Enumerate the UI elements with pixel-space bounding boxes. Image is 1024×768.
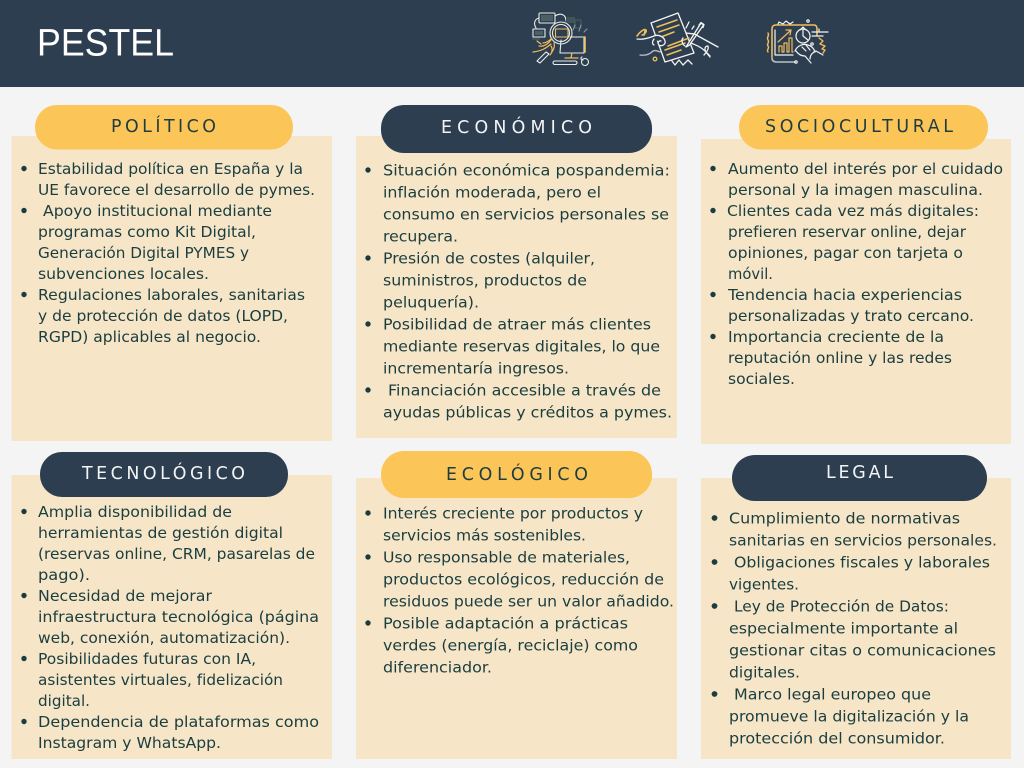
text: Legal: Ley de Protección de Datos: xyxy=(734,598,949,616)
text: Tecnológico: digital. xyxy=(38,692,90,710)
heading pill: Tecnológico: TECNOLÓGICO xyxy=(81,462,245,484)
text: Sociocultural: personalizadas y trato cercano. xyxy=(728,307,974,325)
text: Económico: mediante reservas digitales, lo que xyxy=(383,338,660,356)
text: Legal xyxy=(729,510,997,748)
text: Sociocultural: reputación online y las redes xyxy=(728,349,952,367)
text: Ecológico: residuos puede ser un valor añadido. xyxy=(383,592,674,610)
text: Político: Regulaciones laborales, sanitarias xyxy=(38,286,305,304)
text: Económico: Presión de costes (alquiler, xyxy=(383,250,595,268)
text: Sociocultural: Tendencia hacia experiencias xyxy=(727,286,962,304)
heading pill: Político: POLÍTICO xyxy=(111,115,216,137)
text: Político: Apoyo institucional mediante xyxy=(43,202,272,220)
text: Sociocultural xyxy=(727,160,1003,388)
text: Político xyxy=(38,160,315,346)
text: Sociocultural: sociales. xyxy=(728,370,795,388)
heading pill: Económico xyxy=(381,105,652,153)
heading pill: Sociocultural: SOCIOCULTURAL xyxy=(765,117,953,137)
text: Político: RGPD) aplicables al negocio. xyxy=(38,328,261,346)
text: Político: programas como Kit Digital, xyxy=(38,223,256,241)
panel: Ecológico xyxy=(356,451,677,759)
text: Económico: Financiación accesible a través de xyxy=(388,382,661,400)
text: Sociocultural: Clientes cada vez más digitales: xyxy=(727,202,979,220)
text: Económico: Situación económica pospandemia: xyxy=(383,162,670,180)
text: Legal: gestionar citas o comunicaciones xyxy=(729,642,996,660)
panel: Legal xyxy=(701,455,1011,759)
text: Ecológico: diferenciador. xyxy=(383,658,492,676)
heading pill: Legal: LEGAL xyxy=(826,463,893,483)
title: PESTEL xyxy=(37,22,174,64)
text: Tecnológico xyxy=(38,503,319,752)
bullets: Político xyxy=(21,166,27,297)
text: Económico: incrementaría ingresos. xyxy=(383,360,569,378)
heading pill: Sociocultural xyxy=(739,105,988,150)
icon: analytics tablet xyxy=(767,20,828,63)
heading pill: Ecológico: ECOLÓGICO xyxy=(446,463,588,485)
text: Ecológico: verdes (energía, reciclaje) como xyxy=(383,636,638,654)
heading pill: Ecológico xyxy=(381,451,652,498)
text: Legal: especialmente importante al xyxy=(729,620,958,638)
text: Político: y de protección de datos (LOPD, xyxy=(38,307,288,325)
panel: Tecnológico xyxy=(12,452,332,759)
bullets: Legal xyxy=(712,515,717,697)
text: Sociocultural: Importancia creciente de la xyxy=(728,328,944,346)
text: Legal: Obligaciones fiscales y laborales xyxy=(734,554,990,572)
text: Legal: Cumplimiento de normativas xyxy=(729,510,960,528)
text: Legal: promueve la digitalización y la xyxy=(729,708,969,726)
icon: digital research xyxy=(532,13,588,66)
panel: Económico xyxy=(356,105,677,438)
text: Ecológico: Posible adaptación a prácticas xyxy=(383,614,628,632)
header band xyxy=(0,0,1024,87)
bullets: Sociocultural xyxy=(710,166,716,339)
heading pill: Tecnológico xyxy=(40,452,288,497)
text: Económico: consumo en servicios personales se xyxy=(383,206,669,224)
text: Económico xyxy=(383,162,672,422)
panel: Político xyxy=(12,105,332,441)
text: Legal: Marco legal europeo que xyxy=(734,686,931,704)
text: Sociocultural: Aumento del interés por el cuidado xyxy=(728,160,1003,178)
text: Legal: vigentes. xyxy=(729,576,799,594)
text: Político: Generación Digital PYMES y xyxy=(38,244,249,262)
text: Tecnológico: Necesidad de mejorar xyxy=(38,587,213,605)
text: Ecológico xyxy=(383,504,674,676)
text: Económico: peluquería). xyxy=(383,294,479,312)
text: Político: UE favorece el desarrollo de pymes. xyxy=(38,181,315,199)
text: Tecnológico: Dependencia de plataformas como xyxy=(38,713,319,731)
text: Ecológico: Uso responsable de materiales, xyxy=(383,548,630,566)
text: Tecnológico: asistentes virtuales, fidelización xyxy=(38,671,283,689)
bullets: Tecnológico xyxy=(21,509,27,724)
text: Ecológico: Interés creciente por productos y xyxy=(383,504,643,522)
text: Tecnológico: Posibilidades futuras con IA, xyxy=(38,650,256,668)
text: Económico: ayudas públicas y créditos a pymes. xyxy=(383,404,672,422)
heading pill: Económico: ECONÓMICO xyxy=(441,116,592,138)
heading pill: Político xyxy=(35,105,293,150)
heading pill: Legal xyxy=(732,455,987,501)
text: Tecnológico: infraestructura tecnológica (página xyxy=(38,608,319,626)
text: Tecnológico: web, conexión, automatización). xyxy=(38,629,290,647)
text: Ecológico: productos ecológicos, reducción de xyxy=(383,570,664,588)
text: Tecnológico: herramientas de gestión digital xyxy=(38,524,283,542)
text: Económico: suministros, productos de xyxy=(383,272,587,290)
text: Tecnológico: pago). xyxy=(38,566,90,584)
text: Tecnológico: Instagram y WhatsApp. xyxy=(38,734,221,752)
text: Económico: recupera. xyxy=(383,228,458,246)
text: Legal: digitales. xyxy=(729,664,800,682)
text: Legal: protección del consumidor. xyxy=(729,730,945,748)
text: Sociocultural: personal y la imagen masculina. xyxy=(728,181,983,199)
text: Ecológico: servicios más sostenibles. xyxy=(383,526,586,544)
panel: Sociocultural xyxy=(701,105,1011,444)
bullets: Económico xyxy=(365,167,371,393)
text: Sociocultural: prefieren reservar online, dejar xyxy=(728,223,967,241)
text: Económico: Posibilidad de atraer más clientes xyxy=(383,316,651,334)
text: Legal: sanitarias en servicios personales. xyxy=(729,532,997,550)
text: Económico: inflación moderada, pero el xyxy=(383,184,601,202)
icon: document signing xyxy=(637,13,718,65)
bullets: Ecológico xyxy=(365,510,371,626)
text: Político: Estabilidad política en España y la xyxy=(38,160,303,178)
text: Político: subvenciones locales. xyxy=(38,265,209,283)
text: Tecnológico: Amplia disponibilidad de xyxy=(38,503,232,521)
text: Sociocultural: móvil. xyxy=(728,265,773,283)
text: Tecnológico: (reservas online, CRM, pasarelas de xyxy=(38,545,315,563)
text: Sociocultural: opiniones, pagar con tarjeta o xyxy=(728,244,963,262)
